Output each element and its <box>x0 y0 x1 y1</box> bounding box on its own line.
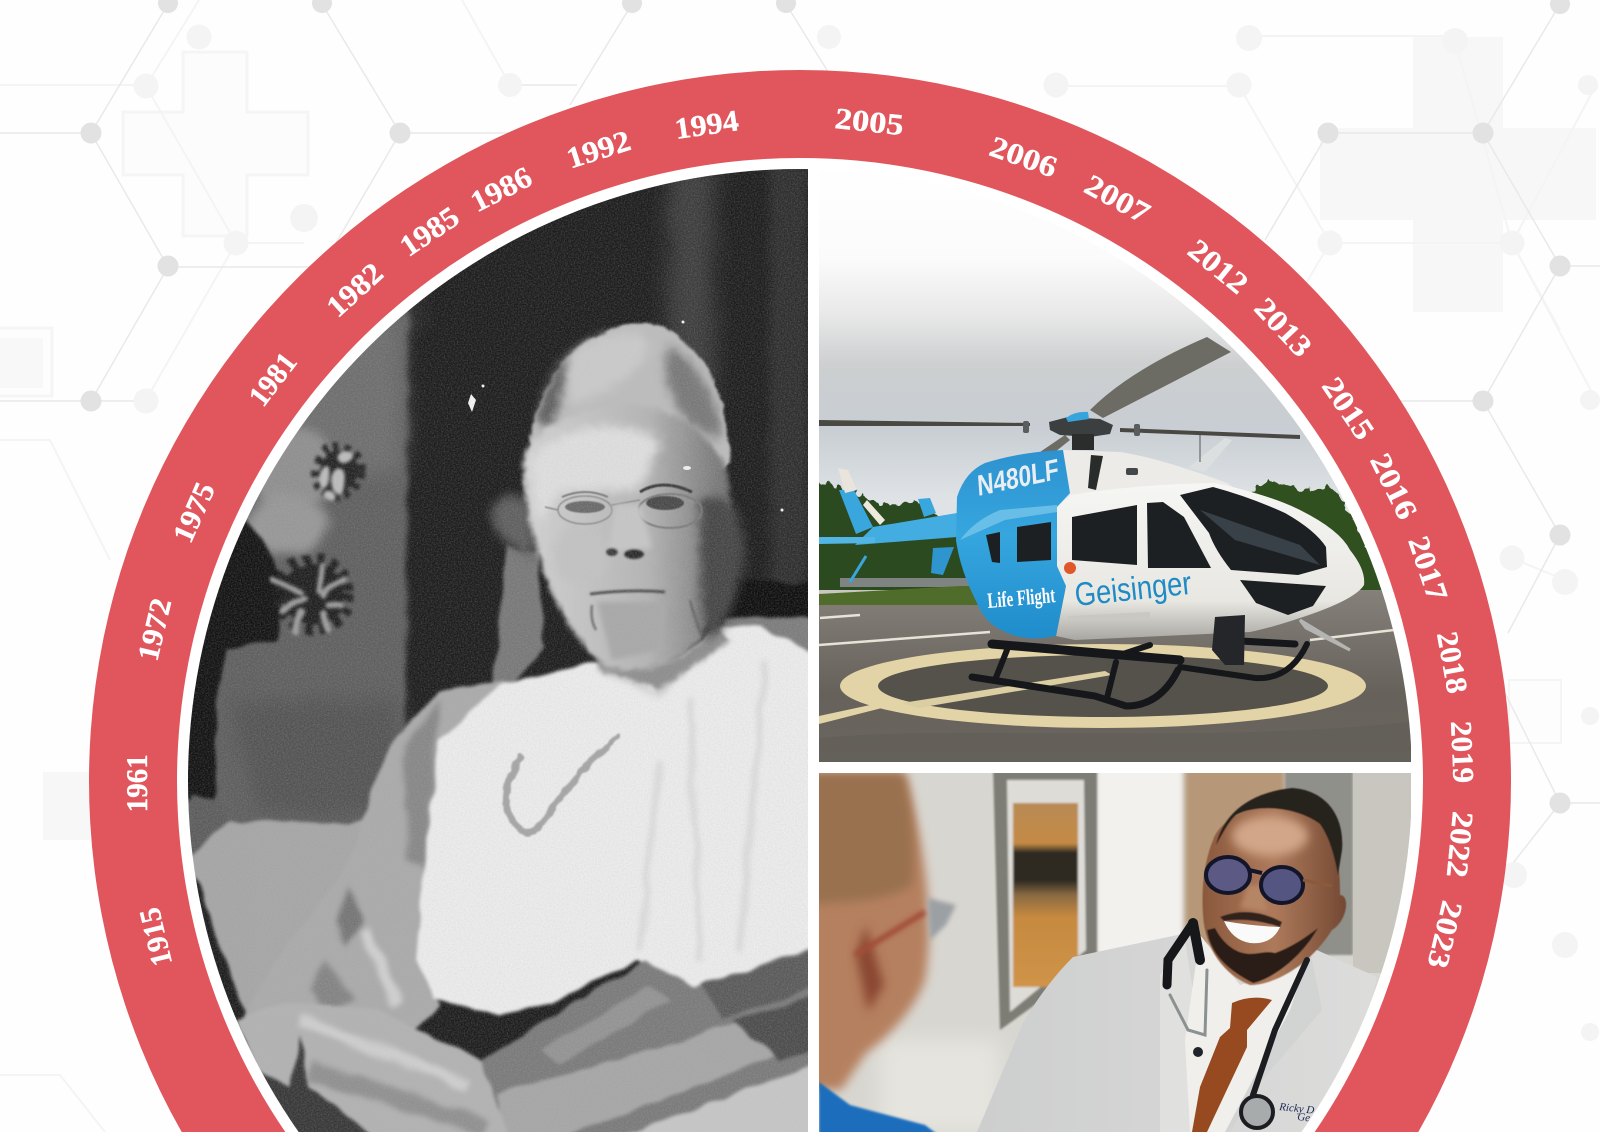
year 1915: 1915 <box>133 904 179 969</box>
Life Flight livery text: Life Flight <box>986 582 1057 613</box>
dark fold corner <box>260 1036 370 1132</box>
moustache <box>1220 912 1282 927</box>
white disc inside ring <box>177 158 1423 1132</box>
blouse <box>416 627 830 1014</box>
pad lines <box>819 615 1411 645</box>
portrait backdrop <box>188 169 808 1062</box>
year 2018: 2018 <box>1430 629 1474 696</box>
year 2012: 2012 <box>1181 233 1254 301</box>
hair <box>530 323 730 476</box>
patient head, blurred foreground <box>810 773 929 1090</box>
embroidered name on coat <box>1278 1101 1327 1124</box>
doctor white coat <box>977 933 1377 1132</box>
rotor blades <box>819 337 1300 452</box>
doctor head <box>1202 788 1346 985</box>
face <box>1202 805 1346 985</box>
lower wall glow <box>880 1040 1000 1132</box>
specks on the print <box>468 320 784 512</box>
year 1961: 1961 <box>121 754 154 812</box>
right wall <box>1353 773 1413 973</box>
neck and chin shadow <box>587 629 732 694</box>
eyes and spectacles <box>545 485 702 528</box>
head of woman <box>490 323 745 690</box>
doctor smile <box>1224 921 1280 943</box>
distant road and cars <box>819 578 970 594</box>
fuselage highlight <box>960 505 1057 540</box>
engine cowling <box>1063 450 1240 497</box>
blue fuselage <box>956 450 1070 639</box>
striped blanket on lap <box>480 942 830 1132</box>
table <box>192 818 362 1012</box>
right face shadow <box>700 497 745 640</box>
registration N480LF: N480LF <box>976 454 1060 503</box>
rotor hub and mast <box>1023 412 1140 450</box>
year 2005: 2005 <box>833 102 905 142</box>
year 1986: 1986 <box>465 161 537 219</box>
Geisinger livery text: Geisinger <box>1073 564 1193 613</box>
stethoscope <box>1167 923 1307 1128</box>
year labels around ring <box>121 102 1480 971</box>
year 1994: 1994 <box>673 104 741 146</box>
grey panel <box>1285 765 1353 955</box>
hexagon lines <box>0 4 1600 867</box>
panel: doctor consultation photo <box>810 765 1413 1132</box>
sky <box>819 271 1366 548</box>
forehead highlight <box>530 426 660 525</box>
doctor shirt <box>1185 935 1305 1132</box>
embroidered name on coat: Ricky D H <box>1278 1101 1327 1118</box>
year 2006: 2006 <box>985 130 1061 184</box>
trees <box>810 480 1395 604</box>
tail assembly <box>819 468 957 582</box>
cabin windows <box>986 487 1327 615</box>
windshield sheen <box>1200 510 1320 565</box>
white fuselage <box>1056 483 1364 640</box>
stray hair <box>490 495 535 560</box>
nose probe <box>1300 620 1350 650</box>
panel: historic portrait of elderly woman <box>188 169 808 1132</box>
shawl folds <box>310 700 440 1015</box>
grass <box>819 586 978 605</box>
nose and cheeks <box>1240 885 1268 912</box>
white pillar <box>1097 765 1182 965</box>
red warning dot <box>1064 562 1076 574</box>
filled medical cross, right <box>1320 37 1596 312</box>
coat right lapel <box>1215 950 1322 1132</box>
faint squares, edges <box>0 328 1561 840</box>
nose and mouth <box>590 505 702 660</box>
year 1972: 1972 <box>132 595 178 664</box>
face <box>523 405 731 670</box>
year 2022: 2022 <box>1440 810 1479 879</box>
office wall <box>819 773 1411 1132</box>
faint medical cross, left <box>123 52 308 236</box>
year 1992: 1992 <box>563 124 635 175</box>
year 1985: 1985 <box>394 200 465 263</box>
year 2016: 2016 <box>1363 448 1424 525</box>
framed artwork <box>993 765 1097 1030</box>
panel: Life Flight helicopter photo <box>819 271 1411 762</box>
doctor glasses <box>1206 857 1332 903</box>
year 2017: 2017 <box>1401 532 1454 605</box>
left cheek tone <box>554 525 606 585</box>
asphalt <box>819 590 1411 762</box>
wood panel <box>1185 765 1285 945</box>
year 2013: 2013 <box>1248 291 1318 364</box>
chair back <box>494 545 545 690</box>
year 1982: 1982 <box>320 256 390 324</box>
doctor beard <box>1207 928 1318 983</box>
film grain overlay <box>180 160 808 1132</box>
main gear strut <box>1212 615 1245 665</box>
year 2023: 2023 <box>1421 898 1468 971</box>
embroidered name on coat: Ge <box>1297 1111 1311 1124</box>
coat front panel <box>1160 940 1215 1132</box>
portrait scene: wall, flowers, table, clothing <box>188 169 808 1132</box>
patient glasses <box>855 898 956 955</box>
landing gear <box>972 641 1307 706</box>
hair shadows <box>536 333 722 440</box>
year 1981: 1981 <box>242 346 304 413</box>
shawl <box>242 680 504 1031</box>
necklace <box>506 737 617 832</box>
doctor necktie <box>1192 998 1272 1132</box>
year 1975: 1975 <box>167 478 222 548</box>
patient blue shirt <box>819 1082 945 1132</box>
year 2019: 2019 <box>1444 720 1480 784</box>
year 2015: 2015 <box>1315 371 1381 446</box>
lap blanket left <box>235 1003 515 1132</box>
year 2007: 2007 <box>1079 168 1155 230</box>
cabin door sill <box>1068 612 1150 621</box>
hexagon nodes <box>80 0 1570 814</box>
antenna fin <box>1192 435 1232 466</box>
helipad ring <box>819 644 1411 747</box>
doctor hair <box>1216 788 1342 875</box>
dark band behind right shoulder <box>722 580 808 654</box>
forehead highlight <box>1232 816 1308 856</box>
flowers in vase <box>180 426 358 875</box>
